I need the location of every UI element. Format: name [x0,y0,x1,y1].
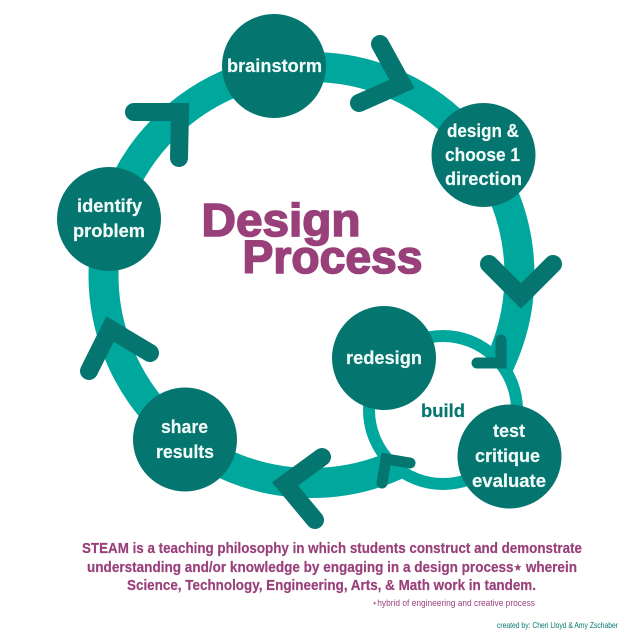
node: brainstorm [222,14,326,118]
title: Process [242,231,422,283]
arrow: test to share [285,457,322,520]
node: brainstorm: brainstorm [227,56,322,76]
build loop ring [369,336,517,484]
description text: Science, Technology, Engineering, Arts, & Math work in tandem. [127,578,536,594]
description text: STEAM is a teaching philosophy in which students construct and demonstrate [82,541,582,557]
arrow: build loop right [477,340,501,363]
node: test critique evaluate: test [493,421,525,441]
node: test critique evaluate [458,404,562,508]
node: redesign: redesign [346,348,422,368]
main cycle ring [104,67,520,483]
inner cutout of build loop [369,336,517,484]
title [202,194,422,283]
node: design and choose 1 direction: design & [447,121,519,141]
label: build: build [421,401,465,421]
description text [82,541,582,594]
title: Design [202,194,360,246]
arrow: identify to brainstorm [134,112,180,158]
node: share results: share [161,417,208,437]
node: identify problem: identify [77,196,142,216]
arrow: brainstorm to design [359,44,402,103]
footnote: ⋆hybrid of engineering and creative process [372,598,535,608]
node: share results [133,388,237,492]
arrow: share to identify [89,329,150,371]
node: redesign [332,306,436,410]
description text: understanding and/or knowledge by engaging in a design process⋆ wherein [87,560,577,576]
node: design and choose 1 direction [432,103,536,207]
node: identify problem: problem [73,221,145,241]
arrow: design to test [489,264,553,296]
node: share results: results [156,442,214,462]
node: test critique evaluate: critique [475,446,540,466]
node: test critique evaluate: evaluate [472,471,546,491]
arrow: build loop bottom [382,459,410,483]
node: design and choose 1 direction: direction [445,169,522,189]
node: identify problem [57,167,161,271]
node: design and choose 1 direction: choose 1 [445,145,520,165]
